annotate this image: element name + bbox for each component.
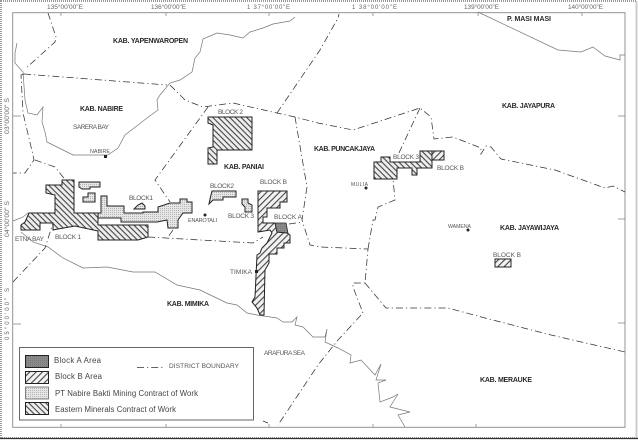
place and block labels: BLOCK B [437,165,464,172]
longitude labels: 135°00'00"E [47,5,83,11]
legend item: Block B Area: Block B Area [55,372,103,381]
place and block labels: BLOCK 3 [393,154,419,161]
legend item: district boundary [137,363,240,370]
place and block labels: WAMENA [448,224,472,230]
region labels: KAB. MERAUKE [480,377,532,384]
latitude labels [5,98,11,340]
place and block labels: BLOCK A [274,214,303,221]
latitude labels: 04°00'00" S [5,201,11,237]
longitude labels: 140°00'00"E [568,5,603,11]
legend item: PT Nabire Bakti [26,387,198,399]
longitude labels: 139°00'00"E [464,5,499,11]
place and block labels: ETNA BAY [15,236,45,243]
place and block labels: BLOCK1 [129,195,153,202]
longitude labels: 136°00'00"E [151,5,186,11]
place and block labels: BLOCK 3 [228,213,254,220]
place and block labels: ARAFURA SEA [264,350,306,357]
region labels: KAB. MIMIKA [167,301,209,308]
region labels: KAB. YAPENWAROPEN [113,38,188,45]
place and block labels: MULIA [351,182,369,188]
region labels: KAB. NABIRE [80,106,123,113]
region labels: KAB. JAYAWIJAYA [500,225,559,232]
legend item: Block A Area: Block A Area [54,356,102,365]
region labels [80,16,559,384]
place and block labels: SARERA BAY [73,124,110,131]
Block A area [275,223,288,233]
place and block labels [15,109,521,357]
legend item: Eastern Minerals [26,402,176,414]
place and block labels: BLOCK B [493,252,521,259]
legend item: Eastern Minerals: Eastern Minerals Contract of Work [55,405,176,414]
Eastern Minerals area [21,117,432,240]
region labels: KAB. PANIAI [224,164,264,171]
legend item: Block B Area [26,372,103,384]
longitude labels: 1 38°00'00"E [352,5,397,11]
latitude labels: 05°00'00" S [5,288,11,340]
town markers [104,155,470,273]
place and block labels: BLOCK2 [210,183,234,190]
legend [20,348,254,420]
place and block labels: ENAROTALI [188,218,217,224]
region labels: KAB. PUNCAKJAYA [314,146,375,153]
region labels: KAB. JAYAPURA [502,103,555,110]
place and block labels: BLOCK 2 [218,109,243,116]
legend item: district boundary: DISTRICT BOUNDARY [169,363,240,370]
place and block labels: NABIRE [90,149,111,155]
region labels: P. MASI MASI [507,16,551,23]
Block B area [252,151,511,315]
latitude labels: 03°00'00" S [5,98,11,134]
place and block labels: BLOCK B [260,179,287,186]
legend item: PT Nabire Bakti: PT Nabire Bakti Mining Contract of Work [55,389,198,398]
PT Nabire Bakti area [79,182,252,228]
longitude labels: 1 37°00'00"E [247,5,290,11]
legend item: Block A Area [26,356,102,368]
longitude labels [47,5,603,11]
place and block labels: TIMIKA [230,269,253,276]
place and block labels: BLOCK 1 [55,234,81,241]
